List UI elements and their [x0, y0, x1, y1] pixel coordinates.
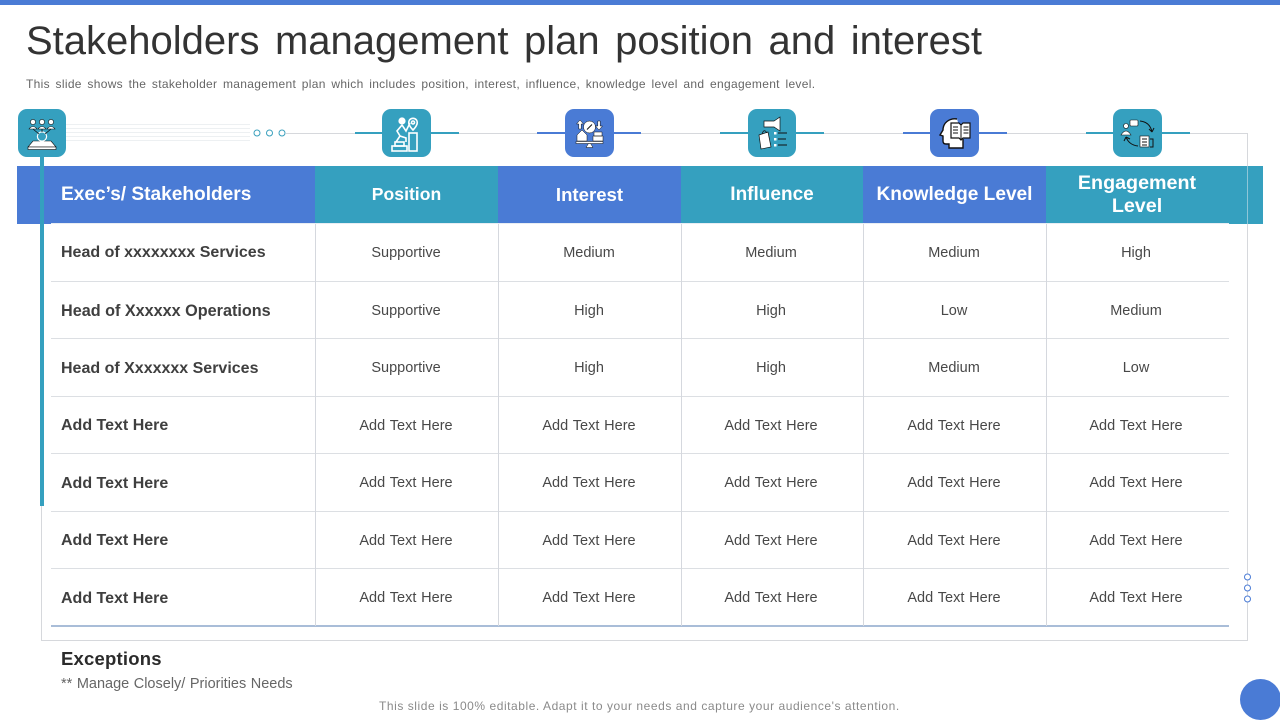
column: Position values: Supportive — [371, 303, 441, 319]
column: Position values: Add Text Here — [359, 590, 453, 606]
column: Influence values — [724, 245, 818, 606]
row label 3: Head of Xxxxxxx Services — [61, 360, 258, 377]
header: Knowledge Level — [863, 166, 1046, 224]
exceptions note: ** Manage Closely/ Priorities Needs — [61, 676, 293, 692]
row label 2: Head of Xxxxxx Operations — [61, 302, 271, 320]
column: Engagement Level values: Add Text Here — [1089, 533, 1183, 549]
column: Position values: Supportive — [371, 360, 441, 376]
header: Exec's/ Stakeholders — [17, 166, 315, 224]
column: Engagement Level values: High — [1121, 245, 1151, 261]
column: Knowledge Level values — [907, 245, 1001, 606]
column: Interest values: Medium — [563, 245, 615, 261]
column: Knowledge Level values: Medium — [928, 245, 980, 261]
column: Influence values: Add Text Here — [724, 533, 818, 549]
header: Exec's/ Stakeholders: Exec’s/ Stakeholders — [61, 184, 251, 204]
row label 5: Add Text Here — [61, 475, 168, 492]
header: Influence: Influence — [730, 184, 814, 204]
exceptions heading: Exceptions — [61, 648, 162, 669]
column: Engagement Level values: Add Text Here — [1089, 475, 1183, 491]
column: Knowledge Level values: Medium — [928, 360, 980, 376]
column: Engagement Level values: Low — [1123, 360, 1149, 376]
column: Interest values: High — [574, 303, 604, 319]
column: Knowledge Level values: Low — [941, 303, 967, 319]
column: Engagement Level values: Add Text Here — [1089, 590, 1183, 606]
table header row — [17, 166, 1263, 224]
column: Engagement Level values: Add Text Here — [1089, 418, 1183, 434]
column: Influence values: Medium — [745, 245, 797, 261]
column: Interest values: Add Text Here — [542, 475, 636, 491]
column: Engagement Level values — [1089, 245, 1183, 606]
decorative stripes — [66, 124, 250, 141]
icon: climbing person with pin — [382, 109, 431, 157]
column: Knowledge Level values: Add Text Here — [907, 533, 1001, 549]
row label 4: Add Text Here — [61, 417, 168, 434]
row labels — [61, 244, 271, 607]
column: Position values: Add Text Here — [359, 533, 453, 549]
column: Interest values: Add Text Here — [542, 418, 636, 434]
column: Engagement Level values: Medium — [1110, 303, 1162, 319]
column: Influence values: Add Text Here — [724, 418, 818, 434]
header: Position — [315, 166, 498, 224]
column: Position values — [359, 245, 453, 606]
column: Position values: Add Text Here — [359, 418, 453, 434]
icon: stakeholders with dollar — [18, 109, 66, 157]
row label 6: Add Text Here — [61, 532, 168, 549]
icon: megaphone and checklist — [748, 109, 796, 157]
header: Position: Position — [372, 184, 441, 204]
footer note: This slide is 100% editable. Adapt it to your needs and capture your audience's attention. — [379, 699, 900, 713]
connector circles — [254, 130, 286, 136]
column: Interest values — [542, 245, 636, 606]
header: Influence — [681, 166, 863, 224]
white mask over frame top-left — [36, 128, 286, 138]
column: Interest values: Add Text Here — [542, 590, 636, 606]
header: Engagement Level: Level — [1112, 195, 1162, 217]
header: Engagement Level — [1046, 166, 1263, 224]
column: Knowledge Level values: Add Text Here — [907, 590, 1001, 606]
column: Influence values: Add Text Here — [724, 475, 818, 491]
frame line over header — [1247, 166, 1248, 224]
column: Influence values: High — [756, 303, 786, 319]
icon: balance scale with percent — [565, 109, 614, 157]
icon: engagement cycle — [1113, 109, 1162, 157]
title: Stakeholders management plan position and interest — [26, 19, 982, 63]
icon: head with open book — [930, 109, 979, 157]
header: Interest: Interest — [556, 184, 623, 204]
right connector circles — [1244, 574, 1251, 602]
left teal accent bar — [40, 150, 44, 506]
column: Interest values: High — [574, 360, 604, 376]
header: Knowledge Level: Knowledge Level — [877, 184, 1032, 204]
column: Knowledge Level values: Add Text Here — [907, 475, 1001, 491]
column: Position values: Add Text Here — [359, 475, 453, 491]
column: Influence values: High — [756, 360, 786, 376]
table outer frame — [41, 133, 1248, 641]
column: Position values: Supportive — [371, 245, 441, 261]
header: Engagement Level: Engagement — [1078, 172, 1196, 194]
corner circle — [1240, 679, 1280, 720]
top accent bar — [0, 0, 1280, 5]
subtitle: This slide shows the stakeholder management plan which includes position, interest, influence, knowledge level and engagement level. — [26, 77, 815, 91]
row label 7: Add Text Here — [61, 590, 168, 607]
row label 1: Head of xxxxxxxx Services — [61, 244, 266, 261]
column: Interest values: Add Text Here — [542, 533, 636, 549]
header: Interest — [498, 166, 681, 224]
column: Knowledge Level values: Add Text Here — [907, 418, 1001, 434]
column: Influence values: Add Text Here — [724, 590, 818, 606]
